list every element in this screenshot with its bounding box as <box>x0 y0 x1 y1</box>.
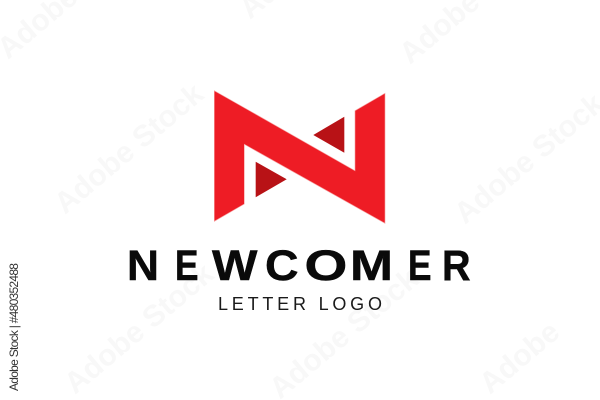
upper dark triangle <box>313 117 344 153</box>
watermark pattern: Adobe <box>473 315 566 400</box>
brand name: E <box>408 242 432 290</box>
tagline: LETTER LOGO <box>218 294 382 314</box>
brand name: R <box>442 241 471 289</box>
brand name: M <box>350 242 393 290</box>
icon: red N logo <box>214 91 385 223</box>
brand name: E <box>175 242 199 290</box>
brand name: C <box>265 242 299 290</box>
lower dark triangle <box>256 162 287 197</box>
watermark pattern: Adobe Stock <box>48 77 210 220</box>
brand name: O <box>304 242 347 290</box>
brand name <box>127 241 471 290</box>
N letterform <box>214 91 385 223</box>
watermark pattern: Adobe Stock <box>58 257 220 400</box>
brand name: W <box>212 241 258 289</box>
stock id side text: Adobe Stock | #480352488 <box>7 263 21 391</box>
brand name: N <box>127 242 159 290</box>
